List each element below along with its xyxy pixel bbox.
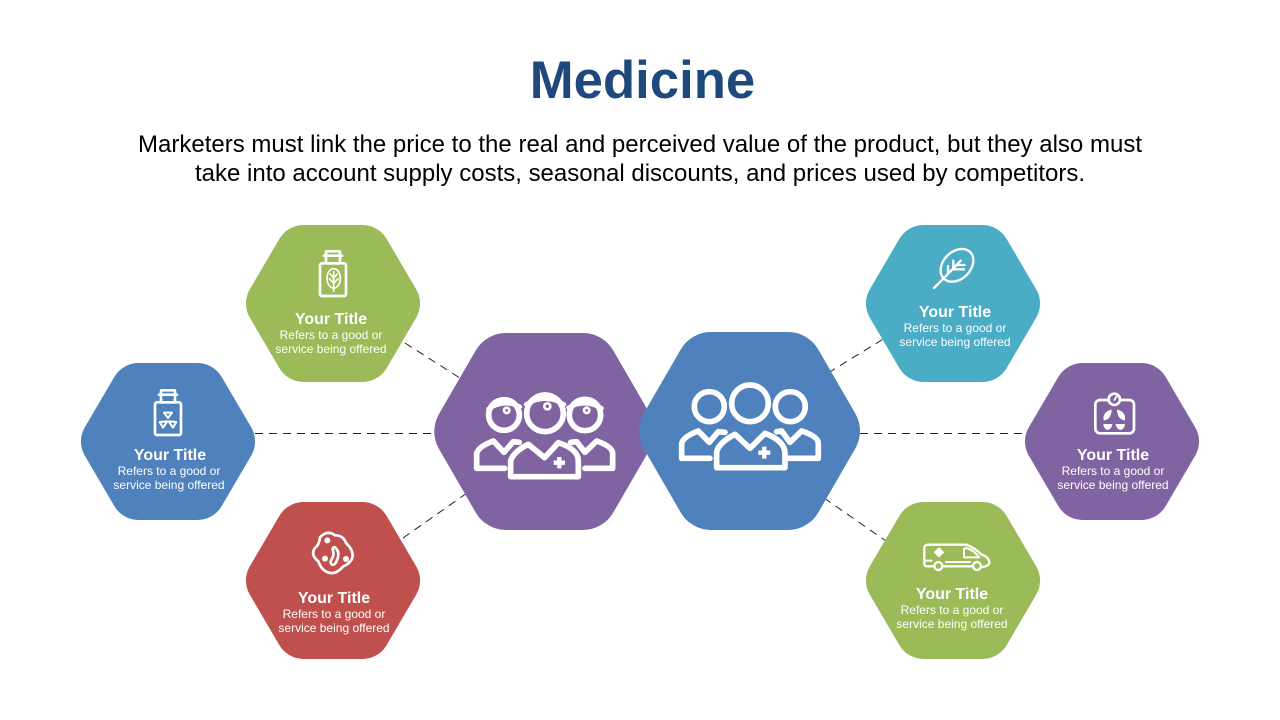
panel: teal leaf card: Your Title bbox=[919, 304, 991, 321]
panel: green van card: service being offered bbox=[896, 617, 1008, 631]
panel: green van card: Your Title bbox=[916, 586, 988, 603]
panel: purple scale card bbox=[1025, 363, 1199, 520]
panel: blue bottle card bbox=[81, 363, 255, 520]
panel: green bottle card: Your Title bbox=[295, 311, 367, 328]
panel: green van card bbox=[866, 502, 1040, 659]
panel: teal leaf card: Refers to a good or bbox=[904, 321, 1006, 335]
icon: herb bottle bbox=[320, 251, 346, 296]
icon: medical staff bbox=[682, 385, 818, 468]
intro text bbox=[138, 131, 1142, 187]
panel: teal leaf card bbox=[866, 225, 1040, 382]
panel: purple scale card: Refers to a good or bbox=[1062, 464, 1164, 478]
panel: red microbe card: Your Title bbox=[298, 590, 370, 607]
dashed connectors bbox=[255, 338, 1025, 541]
panel: red microbe card bbox=[246, 502, 420, 659]
panel: green van card: Refers to a good or bbox=[901, 603, 1003, 617]
center hexagon: medical staff bbox=[639, 332, 860, 530]
title: Medicine bbox=[530, 51, 755, 110]
icon: radiation bottle bbox=[155, 390, 181, 435]
intro text: Marketers must link the price to the real and perceived value of the product, but they also must bbox=[138, 131, 1142, 158]
icon: herbal scale bbox=[1095, 394, 1134, 433]
panel: purple scale card: service being offered bbox=[1057, 478, 1169, 492]
icon: doctors with head mirrors bbox=[477, 395, 613, 477]
panel: blue bottle card: Your Title bbox=[134, 447, 206, 464]
panel: green bottle card: service being offered bbox=[275, 342, 387, 356]
icon: microbe bbox=[313, 533, 353, 573]
panel: blue bottle card: service being offered bbox=[113, 478, 225, 492]
center hexagon: doctors bbox=[434, 333, 655, 530]
panel: green bottle card bbox=[246, 225, 420, 382]
intro text: take into account supply costs, seasonal discounts, and prices used by competitors. bbox=[195, 160, 1085, 187]
icon: leaf bbox=[934, 242, 980, 288]
panel: purple scale card: Your Title bbox=[1077, 447, 1149, 464]
panel: teal leaf card: service being offered bbox=[899, 335, 1011, 349]
panel: red microbe card: service being offered bbox=[278, 621, 390, 635]
panel: blue bottle card: Refers to a good or bbox=[118, 464, 220, 478]
icon: van bbox=[924, 545, 989, 570]
panel: green bottle card: Refers to a good or bbox=[280, 328, 382, 342]
panel: red microbe card: Refers to a good or bbox=[283, 607, 385, 621]
